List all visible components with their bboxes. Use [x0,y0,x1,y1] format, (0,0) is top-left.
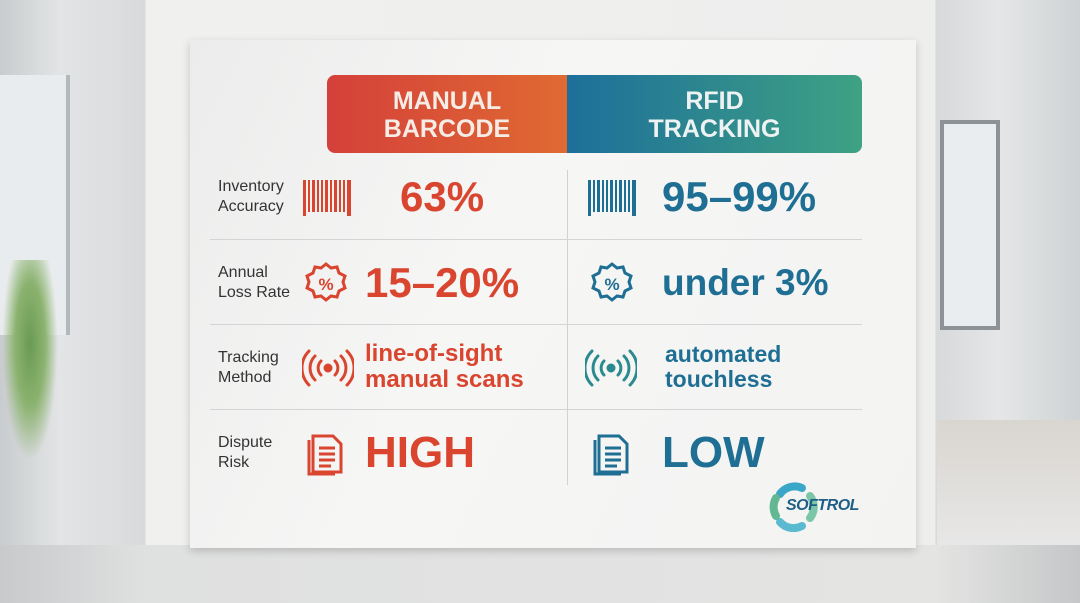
value: HIGH: HIGH [365,428,475,477]
icon: document blue [594,434,628,476]
icon: barcode red [303,180,351,216]
value: under 3%: under 3% [662,262,829,303]
background: right desks [937,420,1080,550]
icon: signal waves teal [585,349,637,387]
header: manual barcode: BARCODE [384,115,510,143]
value: line-of-sight manual scans: manual scans [365,366,524,393]
row 3: tracking method [218,340,781,393]
value: automated touchless [665,341,781,392]
icon: percent badge blue: % [604,275,620,294]
background: floor [0,545,1080,603]
header: rfid tracking: TRACKING [649,115,780,143]
icon: percent badge blue [591,262,633,302]
background: left window [0,75,70,335]
icon: document red [308,434,342,476]
value: 63%: 63% [400,173,484,220]
label: Accuracy [218,198,284,215]
header: rfid tracking [567,75,862,153]
icon: percent badge red [305,262,347,302]
icon: signal waves red [302,349,354,387]
value: 95–99%: 95–99% [662,173,816,220]
label: Risk [218,454,249,471]
label: Tracking [218,349,279,366]
value: LOW: LOW [662,428,765,477]
value: line-of-sight manual scans [365,340,524,393]
vertical divider [567,170,568,485]
label [218,264,290,301]
logo: softrol: SOFTROL [786,497,859,514]
row 4: dispute risk [218,428,765,477]
label [218,349,279,386]
background: left plant [0,260,60,470]
label [218,178,284,215]
value: line-of-sight manual scans: line-of-sight [365,340,502,367]
icon: percent badge red: % [318,275,334,294]
header: manual barcode [327,75,567,153]
row 2: annual loss rate [218,259,829,306]
header: manual barcode: MANUAL [393,87,501,115]
value: automated touchless: touchless [665,366,772,392]
label: Loss Rate [218,284,290,301]
label: Method [218,369,271,386]
value: automated touchless: automated [665,341,781,367]
label: Dispute [218,434,272,451]
board [190,40,916,548]
value: 15–20%: 15–20% [365,259,519,306]
header: rfid tracking: RFID [685,87,744,115]
label [218,434,272,471]
background: right window [940,120,1000,330]
label: Annual [218,264,268,281]
logo: softrol [770,482,859,532]
label: Inventory [218,178,284,195]
icon: barcode blue [588,180,636,216]
row 1: inventory accuracy [218,173,816,220]
